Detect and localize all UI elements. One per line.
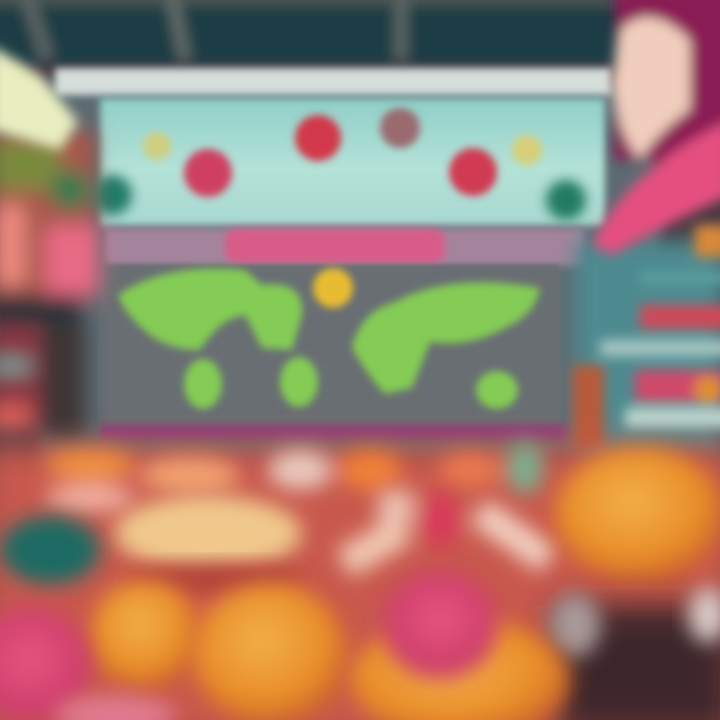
white header bar (55, 68, 611, 95)
ceiling band (0, 0, 720, 65)
icon: yellow marker right (512, 135, 542, 165)
figure: pink haired person (592, 0, 720, 255)
right shelf goods (572, 225, 720, 450)
world map continents (118, 268, 540, 409)
icon: red circle left (184, 149, 232, 197)
cream awning (0, 45, 78, 150)
icon: green circle left (92, 175, 132, 215)
right figure and shelves (572, 0, 720, 460)
light packets (336, 490, 557, 578)
left shelves (0, 130, 100, 440)
oranges bottom (90, 580, 200, 690)
icon: green circle right (546, 180, 586, 220)
title band (105, 228, 585, 266)
teal fruit (0, 516, 100, 584)
small goods row (45, 442, 543, 512)
icon: yellow marker left (143, 132, 171, 160)
icon: yellow star marker (313, 268, 353, 308)
plate (114, 495, 302, 571)
icon: red circle top centre (295, 115, 341, 161)
teal upper panel (92, 98, 605, 226)
foreground produce (0, 442, 720, 720)
dark bottom right (555, 605, 720, 720)
icon: red circle right (449, 148, 497, 196)
map board (100, 265, 570, 440)
pink fruit left (0, 607, 90, 720)
pink fruit centre (382, 571, 498, 679)
wall behind board (40, 80, 660, 460)
orange right (555, 447, 720, 583)
icon: muted circle (380, 108, 420, 148)
